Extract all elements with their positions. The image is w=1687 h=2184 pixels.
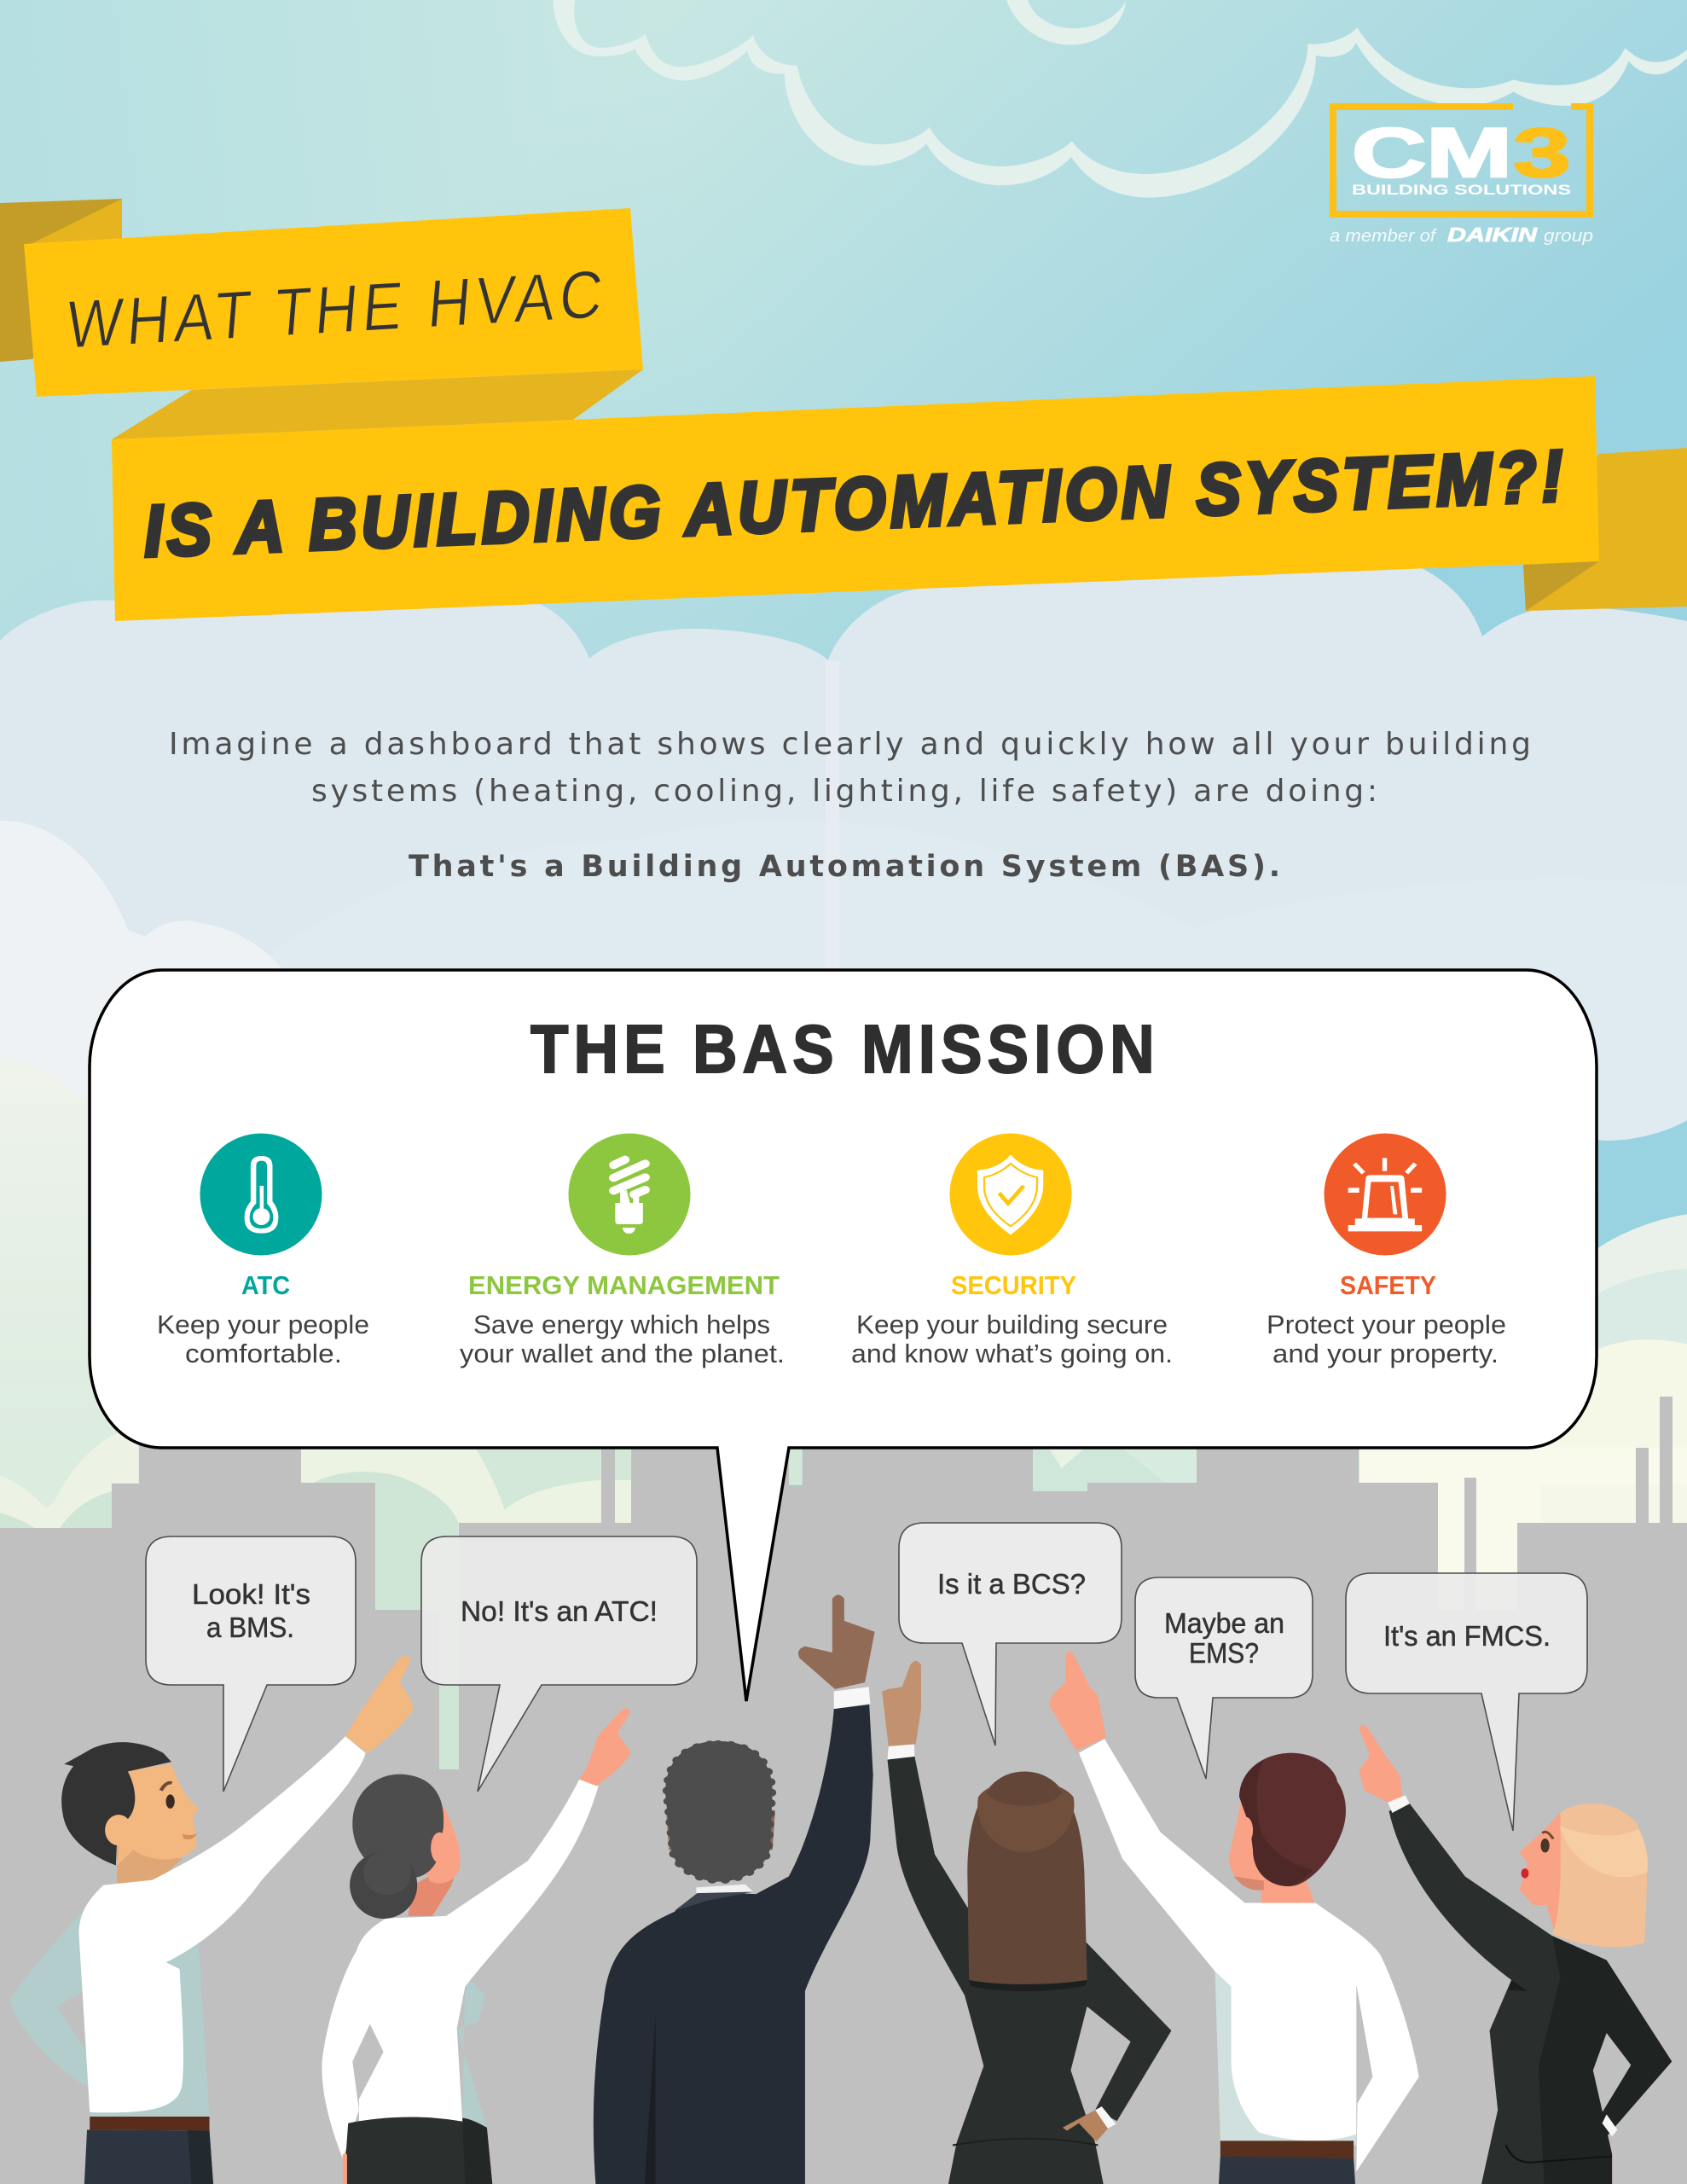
background: top cloud outlines (554, 0, 1687, 198)
speech bubble: No! It's an ATC: No! It's an ATC! (461, 1595, 658, 1627)
heading: is a building automation system: IS A BUILDING AUTOMATION SYSTEM?! (142, 436, 1565, 572)
text: safety description (1267, 1310, 1506, 1368)
icon: thermometer (200, 1133, 322, 1256)
logo: CM3 Building Solutions: 3 (1513, 114, 1571, 192)
logo: CM3 Building Solutions: group (1544, 227, 1593, 246)
logo: CM3 Building Solutions (1330, 107, 1593, 246)
heading: the BAS mission: THE BAS MISSION (530, 1012, 1155, 1088)
icon: shield (950, 1133, 1071, 1256)
speech bubble: Is it a BCS (899, 1523, 1122, 1745)
speech bubble: Look! It's a BMS: Look! It's (192, 1578, 310, 1610)
heading: what the HVAC: WHAT THE HVAC (64, 256, 606, 363)
intro text block: systems (heating, cooling, lighting, life safety) are doing: (311, 774, 1377, 809)
person 4: woman with long brown hair (882, 1661, 1171, 2184)
background: grey city skyline (0, 1397, 1687, 2184)
label: security: SECURITY (951, 1270, 1076, 1300)
speech bubble: Maybe an EMS: EMS? (1189, 1637, 1259, 1669)
speech bubble: It's an FMCS (1346, 1573, 1587, 1831)
speech bubble: It's an FMCS: It's an FMCS. (1383, 1620, 1551, 1652)
speech bubble: Is it a BCS: Is it a BCS? (937, 1568, 1086, 1600)
logo: CM3 Building Solutions: DAIKIN (1447, 224, 1537, 246)
icon: light bulb (568, 1133, 691, 1256)
text: ATC description: comfortable. (185, 1339, 342, 1368)
intro text block: That's a Building Automation System (BAS). (409, 850, 1280, 884)
text: security description: and know what’s going on. (851, 1339, 1173, 1368)
speech bubble: Maybe an EMS: Maybe an (1164, 1607, 1284, 1639)
background: green and cream hills (0, 1055, 1687, 1769)
background: pale cloud bank (0, 567, 1687, 1280)
background: whitish left cloud (0, 821, 285, 1194)
ribbon: main banner with folds (112, 376, 1687, 621)
text: ATC description: Keep your people (157, 1310, 369, 1339)
text: security description: Keep your building secure (856, 1310, 1168, 1339)
label: safety: SAFETY (1340, 1270, 1436, 1300)
person 1: man in white shirt pointing (9, 1656, 414, 2184)
text: energy management description: Save energy which helps (473, 1310, 770, 1339)
speech bubble: Look! It's a BMS: a BMS. (206, 1612, 294, 1643)
text: safety description: Protect your people (1267, 1310, 1506, 1339)
panel: BAS mission speech bubble (90, 970, 1597, 1701)
speech bubble: No! It's an ATC (421, 1536, 697, 1792)
speech bubble: Maybe an EMS (1135, 1577, 1313, 1779)
logo: CM3 Building Solutions: a member of (1330, 227, 1438, 246)
person 2: woman in white blouse pointing (322, 1708, 631, 2184)
text: safety description: and your property. (1272, 1339, 1499, 1368)
text: energy management description (460, 1310, 785, 1368)
speech bubble: Look! It's a BMS (146, 1536, 356, 1792)
text: energy management description: your wallet and the planet. (460, 1339, 785, 1368)
logo: CM3 Building Solutions: BUILDING SOLUTIONS (1352, 183, 1571, 198)
label: energy management: ENERGY MANAGEMENT (468, 1270, 780, 1300)
label: ATC: ATC (241, 1270, 290, 1300)
intro text block (169, 727, 1531, 884)
icon: alarm beacon (1324, 1133, 1446, 1256)
intro text block: Imagine a dashboard that shows clearly and quickly how all your building (169, 727, 1531, 762)
text: security description (851, 1310, 1173, 1368)
person 5: man in white shirt with brown hair (1049, 1652, 1419, 2184)
person 6: blonde woman in black suit (1359, 1725, 1672, 2184)
text: ATC description (157, 1310, 369, 1368)
ribbon: top banner with folds (0, 199, 643, 439)
person 3: man in dark suit pointing up (594, 1594, 875, 2184)
logo: CM3 Building Solutions: CM (1352, 113, 1512, 192)
